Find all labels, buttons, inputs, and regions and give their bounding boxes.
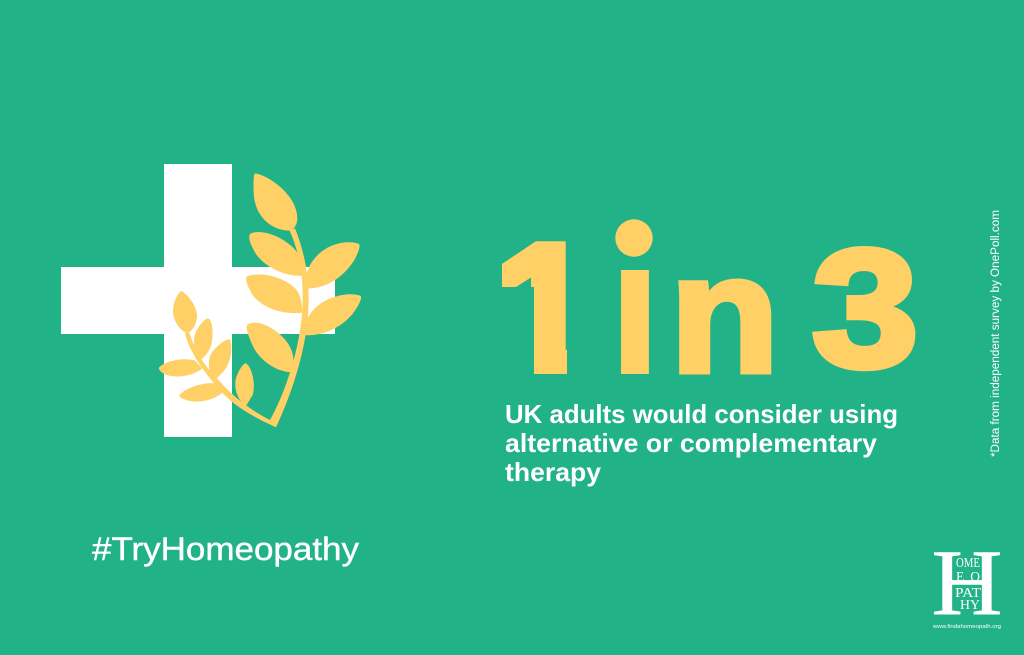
headline statistic: 1 in 3: 3 [812,215,918,402]
description text: therapy [505,457,602,487]
headline statistic: 1 in 3 [502,219,916,374]
hashtag: #TryHomeopathy [92,531,359,567]
icon: white cross [61,164,335,437]
description text [505,399,898,487]
logo: Homeopathy: PAT [955,585,982,600]
description text: UK adults would consider using [505,399,898,429]
logo: Homeopathy: E O [956,569,980,584]
headline statistic: 1 in 3: 1 [494,207,594,414]
headline statistic: 1 in 3: i [611,197,659,413]
description text: alternative or complementary [505,428,878,458]
source note: *Data from independent survey by OnePoll.com [990,210,1002,457]
logo: Homeopathy: OME [956,555,980,570]
logo: Homeopathy: HY [960,597,980,612]
headline statistic: 1 in 3: n [670,220,779,407]
icon: yellow laurel branch [159,173,361,427]
logo url: www.findahomeopath.org [933,624,1001,630]
logo: Homeopathy: H [932,531,1002,635]
